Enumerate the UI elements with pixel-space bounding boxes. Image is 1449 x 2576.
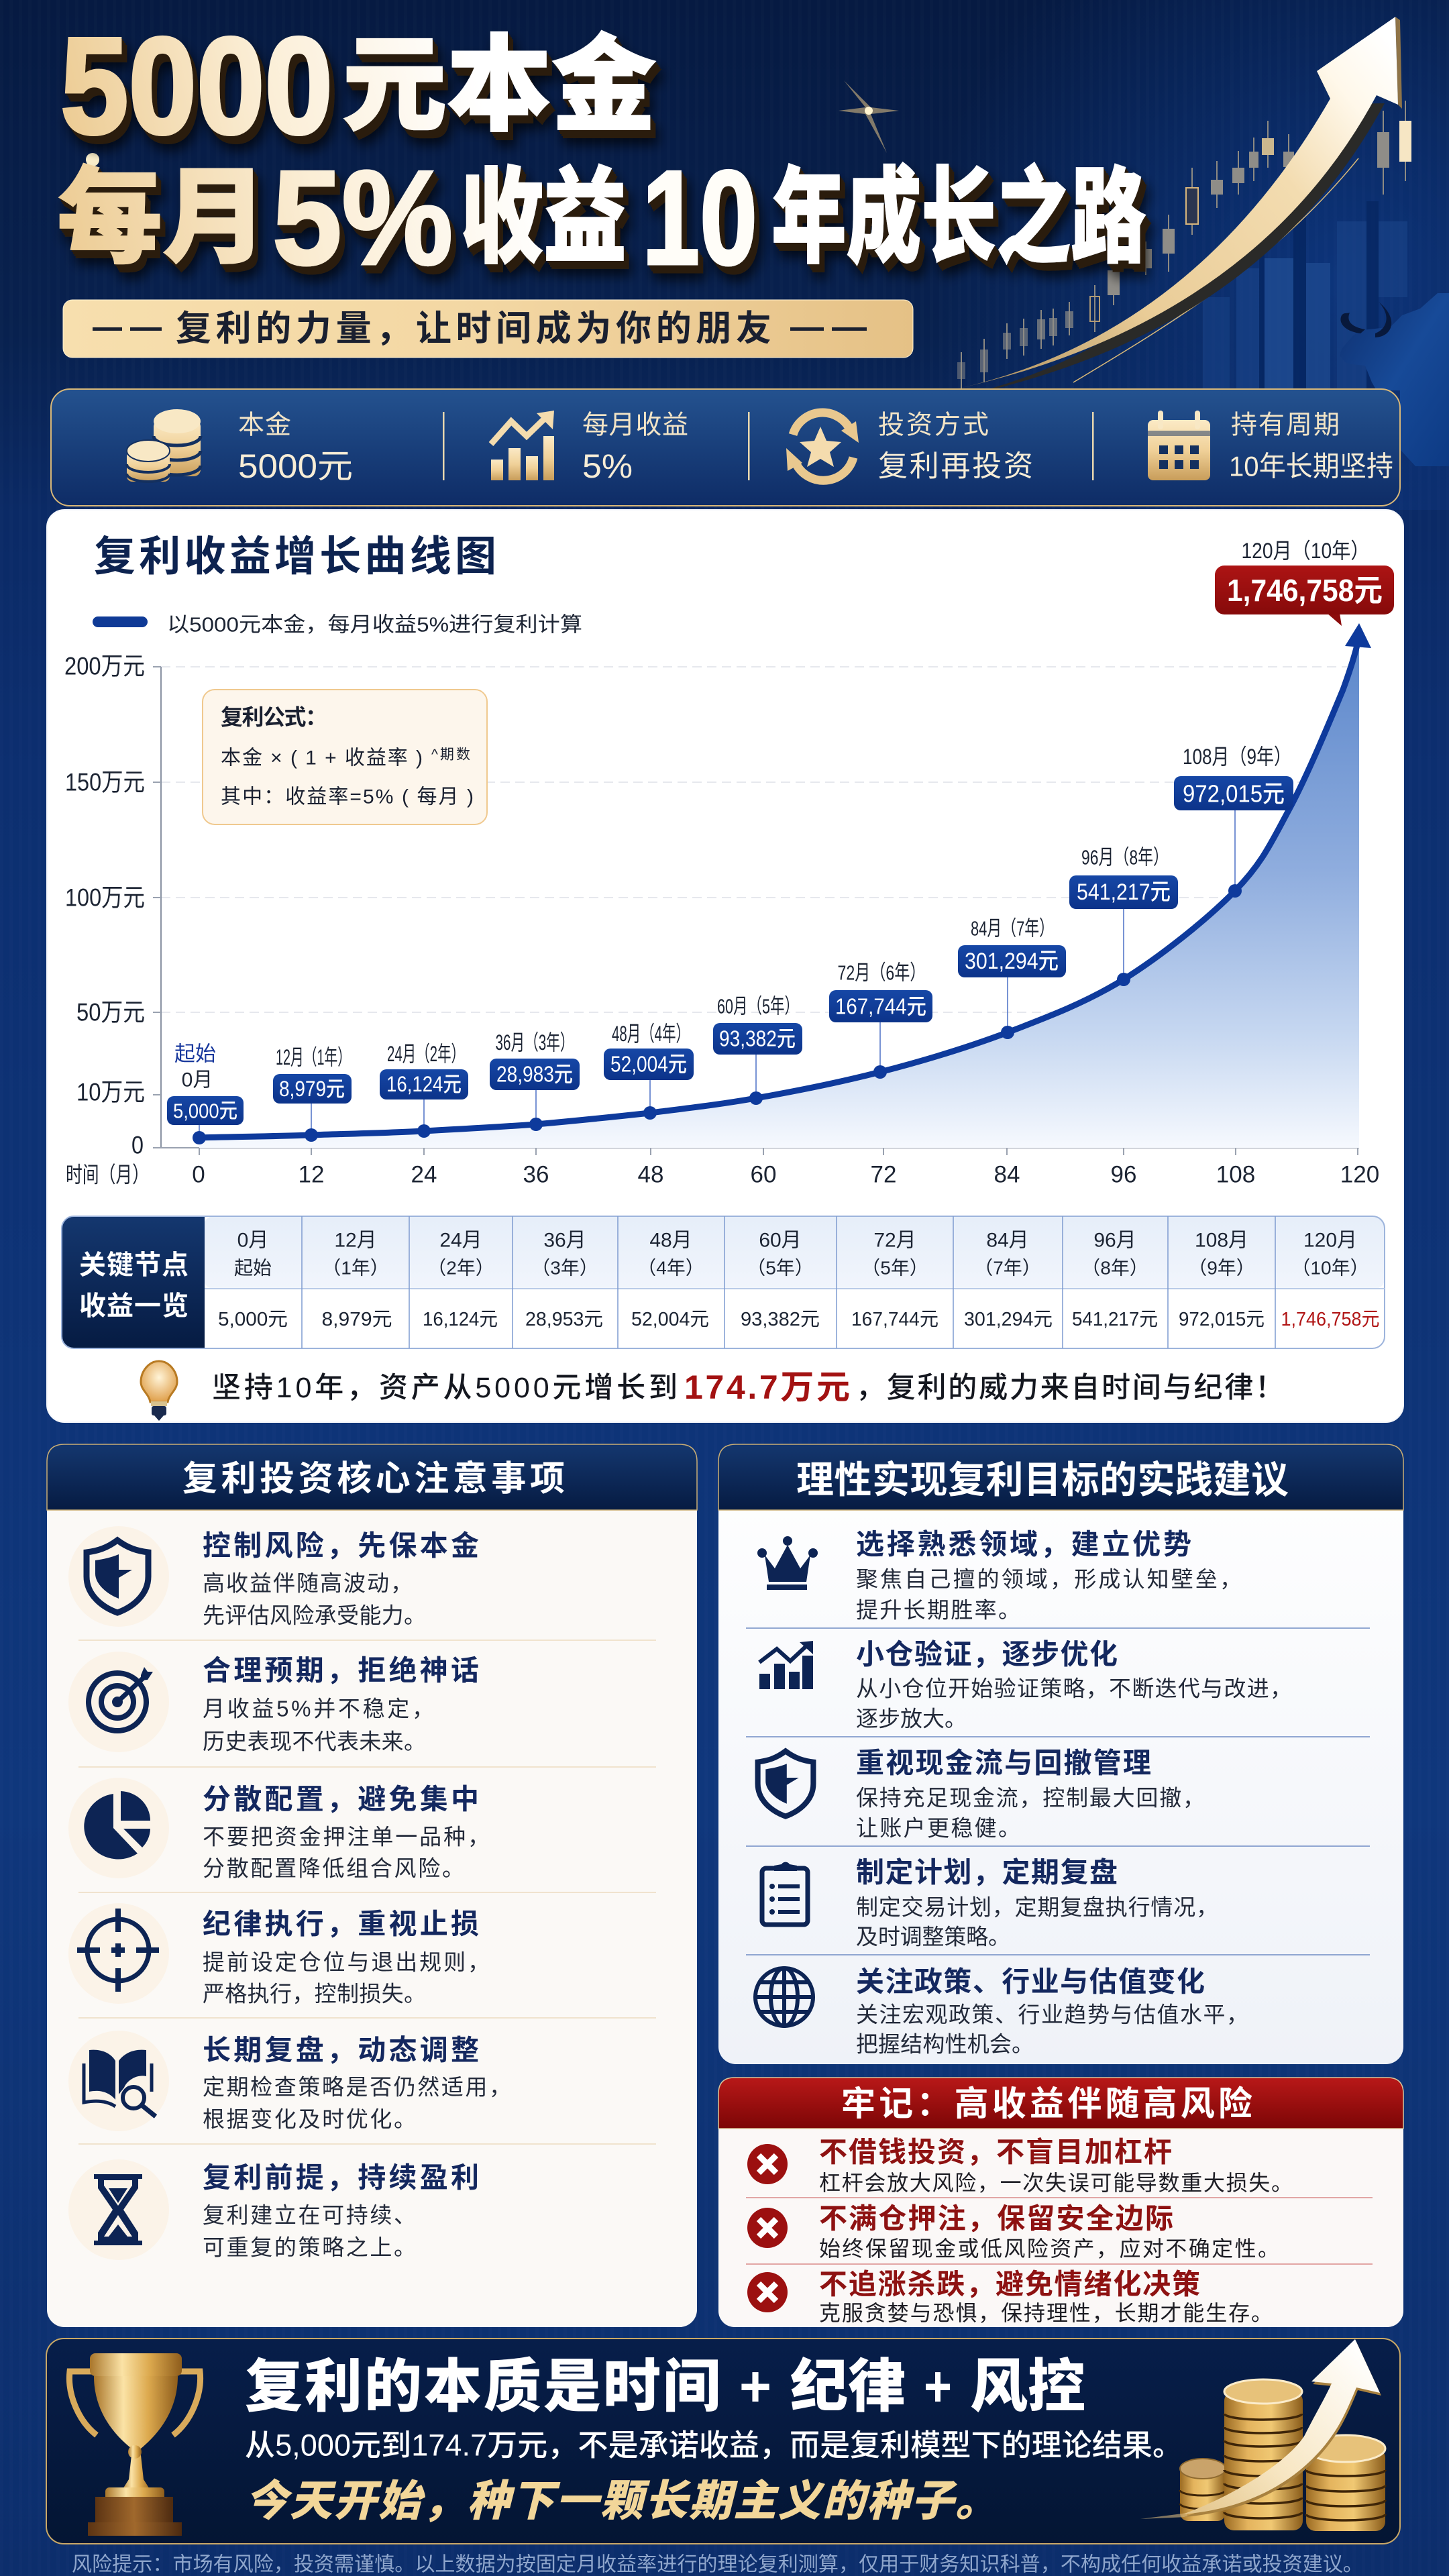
y axis labels xyxy=(64,652,145,1159)
label: month 60: 60月（5年） xyxy=(717,994,799,1018)
warning item: no full position: 始终保留现金或低风险资产，应对不确定性。 xyxy=(819,2237,1279,2261)
item: policy: 关注政策、行业与估值变化 xyxy=(856,1966,1205,1998)
x axis labels: 0 xyxy=(192,1162,205,1187)
label: month 84 xyxy=(958,916,1066,977)
risk disclaimer: 风险提示：市场有风险，投资需谨慎。以上数据为按固定月收益率进行的理论复利测算，仅用于财务知识科普，不构成任何收益承诺或投资建议。 xyxy=(72,2553,1363,2576)
summary table: 12月 xyxy=(334,1229,377,1252)
summary table: 96月 xyxy=(1093,1229,1136,1252)
right heading: 理性实现复利目标的实践建议 xyxy=(796,1458,1289,1501)
warning heading: 牢记：高收益伴随高风险 xyxy=(841,2085,1252,2123)
left heading: 复利投资核心注意事项 xyxy=(182,1460,565,1499)
icon: calendar xyxy=(1148,411,1210,480)
warning item: no chasing: 克服贪婪与恐惧，保持理性，长期才能生存。 xyxy=(819,2301,1273,2325)
item: control risk: 控制风险，先保本金 xyxy=(203,1529,479,1562)
icon: gold coin stacks with arrow xyxy=(1140,2339,1385,2531)
label: month 36: 36月（3年） xyxy=(495,1030,574,1055)
item: long term review: 定期检查策略是否仍然适用， xyxy=(203,2074,511,2100)
item: reasonable expectations xyxy=(68,1652,479,1754)
candlestick chart xyxy=(957,101,1411,389)
label: final value: 120月（10年） xyxy=(1241,539,1370,563)
growth curve xyxy=(199,637,1359,1138)
label: month 60 xyxy=(713,994,802,1055)
item: familiar field xyxy=(757,1528,1242,1622)
summary table: 541,217元 xyxy=(1072,1309,1158,1330)
item: principal: 5000元 xyxy=(238,447,353,485)
item: small position: 从小仓位开始验证策略，不断迭代与改进， xyxy=(856,1676,1292,1701)
title: 5000 xyxy=(60,9,333,162)
summary table: 收益一览 xyxy=(79,1291,189,1321)
x axis labels xyxy=(66,1162,1379,1187)
item: control risk: 高收益伴随高波动， xyxy=(203,1571,413,1595)
banner headline xyxy=(245,2355,1085,2419)
x axis labels: 60 xyxy=(751,1162,776,1187)
formula box xyxy=(203,690,487,824)
banner headline: + xyxy=(739,2355,771,2419)
warning item: no borrowing: 杠杆会放大风险，一次失误可能导数重大损失。 xyxy=(819,2171,1293,2195)
label: month 48: 48月（4年） xyxy=(612,1022,690,1046)
summary table: 52,004元 xyxy=(631,1309,709,1330)
banner call to action: 今天开始，种下一颗长期主义的种子。 xyxy=(245,2477,998,2525)
data points xyxy=(193,884,1242,1144)
x axis labels: 96 xyxy=(1111,1162,1136,1187)
item: cash flow: 保持充足现金流，控制最大回撤， xyxy=(856,1786,1205,1810)
item: discipline: 纪律执行，重视止损 xyxy=(203,1908,479,1940)
y axis labels: 200万元 xyxy=(64,652,145,680)
panel: key cautions xyxy=(47,1444,697,2327)
summary table: （10年） xyxy=(1291,1257,1369,1279)
icon: coins xyxy=(127,409,201,482)
item: compounding premise xyxy=(68,2159,479,2260)
formula box: ^期数 xyxy=(431,747,470,762)
item: diversify: 分散配置降低组合风险。 xyxy=(203,1856,464,1881)
line chart xyxy=(64,539,1394,1187)
item: small position xyxy=(759,1638,1292,1731)
warning item: no borrowing: 不借钱投资，不盲目加杠杆 xyxy=(819,2136,1172,2168)
item: policy: 把握结构性机会。 xyxy=(856,2031,1034,2057)
label: month 96 xyxy=(1069,845,1178,909)
x axis labels: 12 xyxy=(299,1162,324,1187)
takeaway sentence: 174.7万元 xyxy=(684,1368,850,1406)
item: compounding premise: 复利建立在可持续、 xyxy=(203,2203,416,2227)
item: familiar field: 聚焦自己擅的领域，形成认知壁垒， xyxy=(856,1567,1242,1591)
summary table: 0月 xyxy=(237,1229,268,1252)
banner headline: 风控 xyxy=(970,2355,1085,2419)
warning item: no full position: 不满仓押注，保留安全边际 xyxy=(819,2203,1173,2234)
item: cash flow xyxy=(758,1747,1205,1841)
title: 每月 xyxy=(57,160,268,276)
formula box: 复利公式： xyxy=(221,704,327,730)
panel: closing banner xyxy=(46,2339,1400,2544)
y axis labels: 150万元 xyxy=(65,769,145,796)
item: long term review xyxy=(68,2031,511,2132)
title: 收益 xyxy=(460,160,627,276)
label: month 96: 541,217元 xyxy=(1077,879,1171,905)
arrow head on curve xyxy=(1345,623,1371,648)
label: month 84: 301,294元 xyxy=(965,949,1059,974)
item: plan xyxy=(762,1857,1218,1949)
panel: compound growth chart xyxy=(47,510,1403,1422)
summary table: （3年） xyxy=(531,1257,598,1279)
item: diversify: 不要把资金押注单一品种， xyxy=(203,1825,490,1849)
item: policy xyxy=(755,1966,1248,2057)
warning item: no chasing: 不追涨杀跌，避免情绪化决策 xyxy=(819,2269,1200,2300)
label: month 24: 16,124元 xyxy=(386,1072,462,1096)
summary table: 5,000元 xyxy=(218,1309,288,1330)
x axis labels: 108 xyxy=(1216,1162,1255,1187)
formula box: 其中：收益率=5% ( 每月 ) xyxy=(221,786,474,808)
title: 5% xyxy=(272,144,453,292)
warning item: no full position xyxy=(747,2203,1279,2261)
item: holding period: 持有周期 xyxy=(1231,411,1340,440)
x axis labels: 48 xyxy=(638,1162,663,1187)
warning item: no chasing xyxy=(747,2269,1273,2325)
warning item: no borrowing xyxy=(747,2136,1293,2195)
item: holding period xyxy=(1229,411,1393,482)
item: plan: 制定计划，定期复盘 xyxy=(856,1857,1118,1888)
label: start: 5,000元 xyxy=(173,1099,237,1123)
label: month 12 xyxy=(273,1045,352,1104)
y axis labels: 100万元 xyxy=(65,884,145,911)
item: method xyxy=(878,411,1033,483)
label: start: 0月 xyxy=(182,1069,213,1091)
summary table: （7年） xyxy=(974,1257,1041,1279)
label: month 108: 972,015元 xyxy=(1183,780,1285,808)
label: month 36 xyxy=(490,1030,580,1090)
icon: light bulb xyxy=(141,1361,177,1421)
x axis labels: 时间（月） xyxy=(66,1162,149,1187)
summary table: 16,124元 xyxy=(423,1309,498,1330)
title: 年成长之路 xyxy=(771,160,1146,276)
label: final value xyxy=(1215,539,1394,626)
formula box: 本金 × ( 1 + 收益率 ) xyxy=(221,747,423,769)
summary table: （4年） xyxy=(637,1257,704,1279)
takeaway sentence: ，复利的威力来自时间与纪律！ xyxy=(856,1372,1284,1404)
banner headline: 纪律 xyxy=(790,2355,906,2419)
item: long term review: 根据变化及时优化。 xyxy=(203,2106,416,2132)
item: compounding premise: 可重复的策略之上。 xyxy=(203,2235,416,2259)
item: cash flow: 让账户更稳健。 xyxy=(856,1815,1020,1841)
summary table: （1年） xyxy=(322,1257,389,1279)
item: discipline xyxy=(68,1903,490,2006)
item: monthly return xyxy=(582,411,688,485)
summary table xyxy=(62,1216,1385,1348)
panel: practical advice xyxy=(718,1444,1403,2064)
item: small position: 小仓验证，逐步优化 xyxy=(856,1638,1118,1670)
item: diversify xyxy=(68,1778,490,1881)
takeaway sentence: 坚持10年，资产从5000元增长到 xyxy=(212,1372,678,1404)
area fill xyxy=(199,637,1359,1148)
label: month 24: 24月（2年） xyxy=(387,1042,465,1066)
item: plan: 及时调整策略。 xyxy=(856,1924,1010,1949)
panel: key parameters bar xyxy=(51,389,1400,506)
label: month 24 xyxy=(380,1042,468,1099)
item: compounding premise: 复利前提，持续盈利 xyxy=(203,2161,479,2194)
item: monthly return: 5% xyxy=(582,447,633,485)
item: policy: 关注宏观政策、行业趋势与估值水平， xyxy=(856,2002,1248,2027)
item: reasonable expectations: 合理预期，拒绝神话 xyxy=(203,1654,479,1686)
title xyxy=(57,9,1146,292)
icon: rising chart xyxy=(491,411,554,480)
y axis labels: 10万元 xyxy=(76,1079,145,1106)
item: control risk xyxy=(68,1526,479,1627)
summary table: （5年） xyxy=(861,1257,928,1279)
summary table: 24月 xyxy=(439,1229,482,1252)
label: month 36: 28,983元 xyxy=(496,1061,573,1087)
label: start xyxy=(167,1042,244,1125)
chart legend: 以5000元本金，每月收益5%进行复利计算 xyxy=(167,613,582,636)
item: diversify: 分散配置，避免集中 xyxy=(203,1783,479,1815)
summary table: （5年） xyxy=(747,1257,814,1279)
subtitle ribbon xyxy=(63,300,913,358)
summary table: 36月 xyxy=(543,1229,586,1252)
label: month 60: 93,382元 xyxy=(719,1026,796,1051)
item: familiar field: 选择熟悉领域，建立优势 xyxy=(856,1528,1191,1560)
item: small position: 逐步放大。 xyxy=(856,1707,967,1731)
item: plan: 制定交易计划，定期复盘执行情况， xyxy=(856,1894,1218,1920)
decorative market skyline xyxy=(1203,201,1407,389)
x axis labels: 84 xyxy=(994,1162,1020,1187)
stems xyxy=(199,810,1235,1138)
item: monthly return: 每月收益 xyxy=(582,411,688,440)
item: method: 复利再投资 xyxy=(878,449,1033,483)
summary table: 8,979元 xyxy=(322,1309,392,1330)
y axis labels: 0 xyxy=(131,1131,144,1159)
chart heading: 复利收益增长曲线图 xyxy=(94,534,496,580)
item: long term review: 长期复盘，动态调整 xyxy=(203,2034,479,2066)
summary table: 1,746,758元 xyxy=(1281,1309,1379,1330)
summary table: 28,953元 xyxy=(525,1309,603,1330)
summary table: 72月 xyxy=(873,1229,916,1252)
summary table: 84月 xyxy=(986,1229,1029,1252)
item: reasonable expectations: 月收益5%并不稳定， xyxy=(203,1696,434,1721)
label: month 84: 84月（7年） xyxy=(971,916,1054,941)
title: 10 xyxy=(642,144,757,292)
label: month 108: 108月（9年） xyxy=(1183,745,1291,769)
label: month 72: 167,744元 xyxy=(835,994,926,1018)
item: control risk: 先评估风险承受能力。 xyxy=(203,1603,426,1627)
item: method: 投资方式 xyxy=(878,411,989,440)
summary table: 108月 xyxy=(1195,1229,1248,1252)
x axis labels: 24 xyxy=(411,1162,437,1187)
item: principal xyxy=(238,411,353,485)
label: start: 起始 xyxy=(174,1042,216,1065)
label: final value: 1,746,758元 xyxy=(1227,573,1383,608)
summary table: 48月 xyxy=(649,1229,692,1252)
summary table: 93,382元 xyxy=(741,1309,820,1330)
icon: reinvestment cycle xyxy=(786,413,859,480)
item: principal: 本金 xyxy=(238,411,291,440)
x axis labels: 36 xyxy=(523,1162,549,1187)
item: discipline: 提前设定仓位与退出规则， xyxy=(203,1949,490,1975)
label: month 48 xyxy=(604,1022,694,1080)
label: month 72: 72月（6年） xyxy=(837,961,926,985)
y axis labels: 50万元 xyxy=(76,998,145,1026)
label: month 72 xyxy=(829,961,932,1022)
sparkle accents xyxy=(86,80,899,166)
banner headline: + xyxy=(924,2355,952,2419)
item: familiar field: 提升长期胜率。 xyxy=(856,1598,1020,1622)
label: month 48: 52,004元 xyxy=(610,1052,687,1076)
item: discipline: 严格执行，控制损失。 xyxy=(203,1982,426,2006)
item: holding period: 10年长期坚持 xyxy=(1229,451,1393,482)
summary table: 167,744元 xyxy=(851,1309,938,1330)
icon: gold trophy xyxy=(69,2353,201,2536)
summary table: 关键节点 xyxy=(79,1250,189,1280)
item: reasonable expectations: 历史表现不代表未来。 xyxy=(203,1729,426,1754)
label: month 108 xyxy=(1174,745,1293,810)
summary table: 972,015元 xyxy=(1179,1309,1265,1330)
panel: high risk warning xyxy=(718,2078,1403,2327)
summary table: 起始 xyxy=(234,1257,272,1279)
takeaway sentence xyxy=(212,1368,1284,1406)
bull silhouette xyxy=(1340,293,1449,466)
summary table: （9年） xyxy=(1188,1257,1255,1279)
subtitle ribbon: 复利的力量，让时间成为你的朋友 xyxy=(176,309,771,349)
summary table: （8年） xyxy=(1081,1257,1148,1279)
banner headline: 复利的本质是时间 xyxy=(245,2355,720,2419)
item: cash flow: 重视现金流与回撤管理 xyxy=(856,1747,1151,1779)
summary table: 120月 xyxy=(1303,1229,1357,1252)
label: month 96: 96月（8年） xyxy=(1081,845,1169,869)
label: month 12: 12月（1年） xyxy=(276,1045,351,1069)
title: 元本金 xyxy=(342,28,656,144)
summary table: （2年） xyxy=(427,1257,494,1279)
gold growth arrow xyxy=(956,17,1402,397)
summary table: 301,294元 xyxy=(964,1309,1053,1330)
x axis labels: 120 xyxy=(1340,1162,1379,1187)
banner sub text: 从5,000元到174.7万元，不是承诺收益，而是复利模型下的理论结果。 xyxy=(245,2428,1183,2462)
label: month 12: 8,979元 xyxy=(279,1077,345,1101)
summary table: 60月 xyxy=(759,1229,802,1252)
x axis labels: 72 xyxy=(871,1162,896,1187)
